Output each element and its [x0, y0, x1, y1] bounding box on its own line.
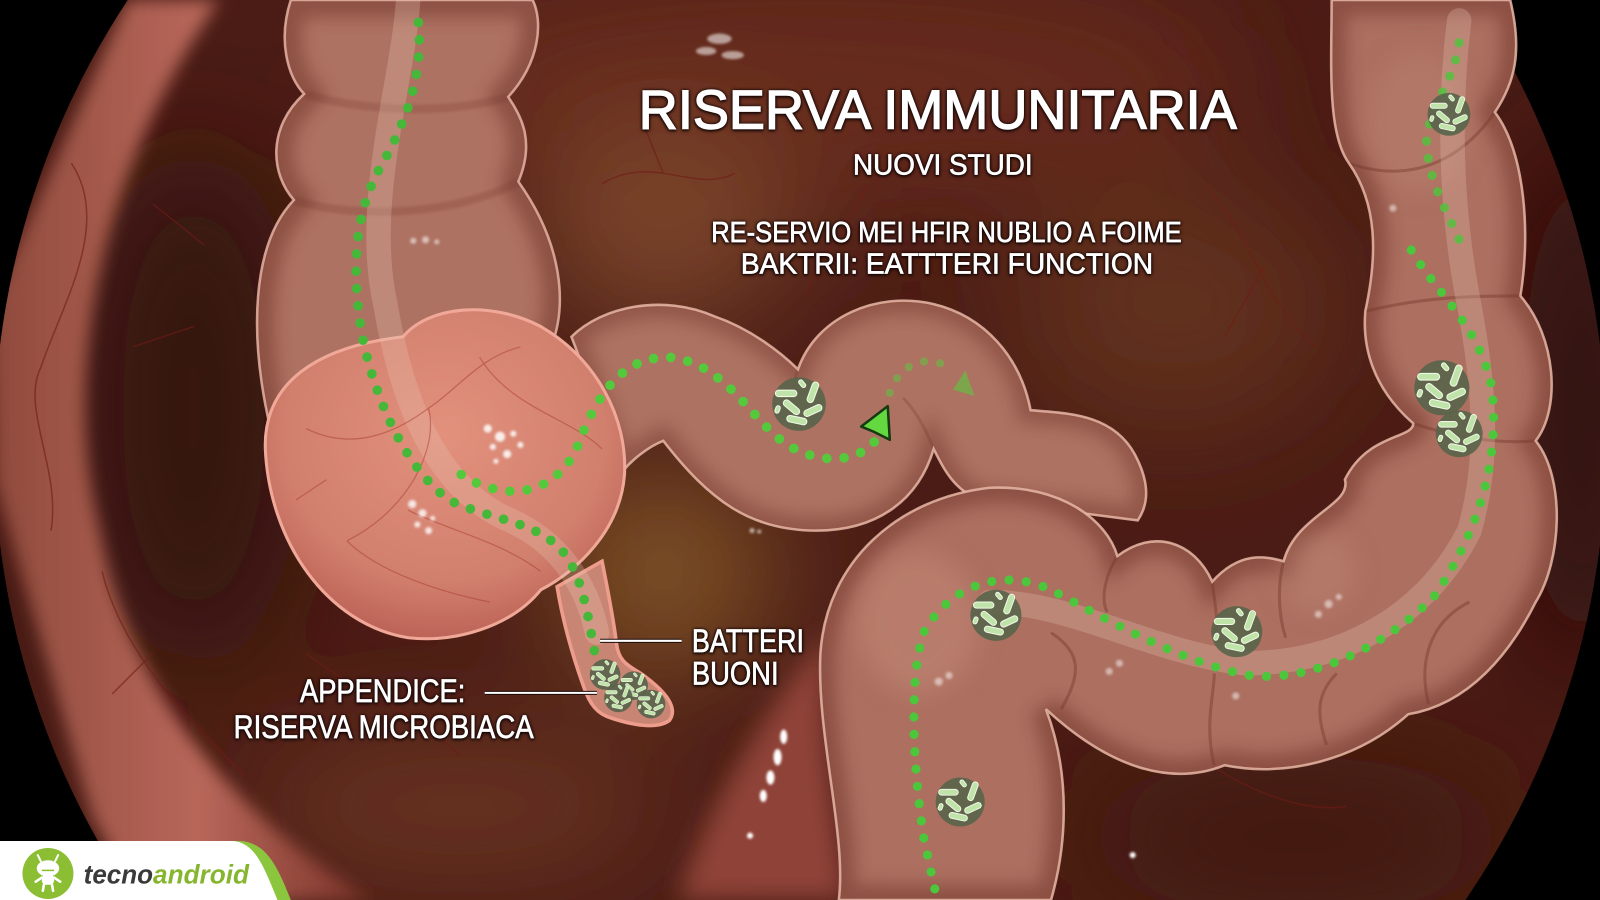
wall fold: left	[0, 0, 372, 900]
wall fold: lower centre	[679, 628, 847, 900]
specular highlights	[408, 34, 1396, 858]
blood vessels on wall	[35, 122, 1347, 808]
intestinal lumen highlights	[378, 0, 1483, 663]
bacteria flow path: cecum to transverse colon	[461, 357, 880, 491]
flow arrow	[861, 406, 890, 440]
description text: RE-SERVIO MEI HFIR NUBLIO A FOIME	[711, 217, 1182, 249]
callout: appendice: APPENDICE:	[300, 672, 465, 709]
logo: tecnoandroid badge: tecno	[84, 860, 153, 890]
colon: transverse	[571, 301, 1146, 531]
callout: batteri buoni: BATTERI	[692, 622, 804, 659]
callout: batteri buoni	[600, 622, 804, 692]
colon: ascending haustra	[257, 0, 560, 429]
faded flow arrow	[953, 370, 974, 396]
description text: BAKTRII: EATTTERI FUNCTION	[741, 248, 1153, 280]
faded flow path continuation	[890, 361, 949, 393]
bacteria flow path: ascending colon to appendix	[356, 22, 597, 663]
title: RISERVA IMMUNITARIA	[639, 79, 1237, 141]
description text	[711, 217, 1182, 280]
colon: cecum	[265, 310, 625, 639]
callout: appendice	[234, 672, 597, 745]
colon: appendix	[557, 561, 672, 726]
bacteria flow path: right colon to descending	[914, 43, 1494, 898]
callout: appendice: RISERVA MICROBIACA	[234, 708, 534, 745]
logo: tecnoandroid badge	[0, 841, 291, 900]
logo icon: android mascot	[22, 848, 73, 899]
logo: tecnoandroid badge: android	[153, 860, 250, 890]
callout: batteri buoni: BUONI	[692, 655, 779, 692]
bacteria clusters	[590, 93, 1483, 827]
colon: descending and right loop	[820, 0, 1557, 900]
veins on cecum	[296, 347, 602, 602]
subtitle: NUOVI STUDI	[853, 149, 1033, 181]
